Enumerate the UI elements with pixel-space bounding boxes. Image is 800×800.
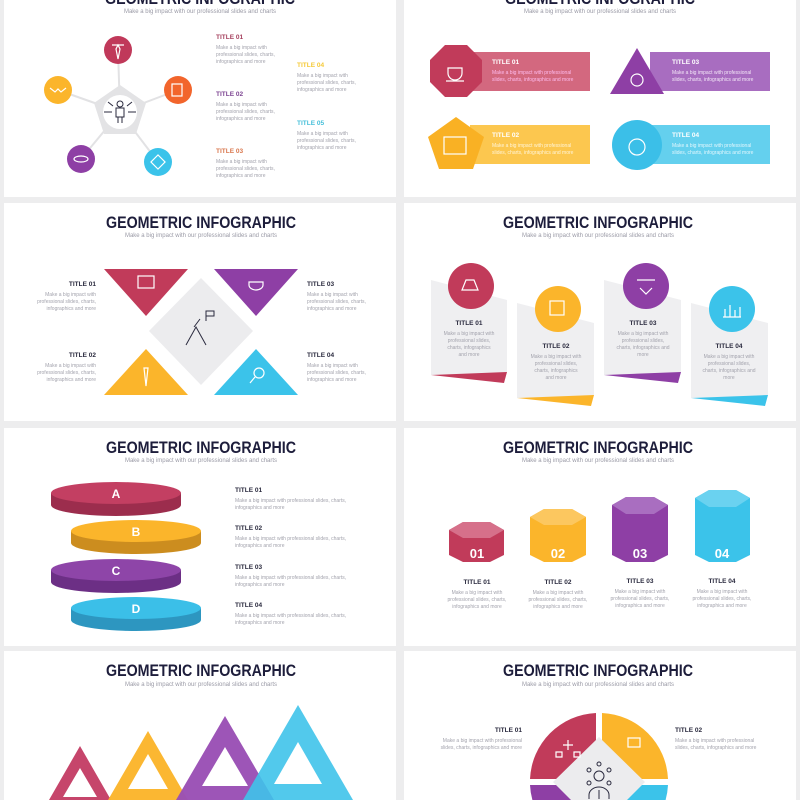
text items: infographics and more bbox=[216, 173, 266, 179]
disc B bbox=[71, 520, 201, 554]
ring segments bbox=[530, 713, 668, 800]
panel: slide 7 triangles bbox=[4, 651, 396, 800]
banner 01 bbox=[430, 45, 590, 97]
disc texts: TITLE 03 bbox=[235, 564, 262, 571]
disc texts: infographics and more bbox=[235, 620, 285, 626]
side texts: professional slides, charts, bbox=[37, 299, 96, 305]
card 02: professional slides, bbox=[535, 361, 577, 367]
prism texts: infographics and more bbox=[615, 603, 665, 609]
center pentagon with person icon bbox=[94, 85, 146, 134]
disc texts: infographics and more bbox=[235, 582, 285, 588]
prism 01: 01 bbox=[470, 546, 484, 561]
card 04: professional slides, bbox=[708, 361, 750, 367]
slide 3 title: GEOMETRIC INFOGRAPHIC bbox=[106, 213, 296, 232]
slide 8 texts: Make a big impact with professional bbox=[443, 738, 522, 744]
prism texts: TITLE 02 bbox=[544, 579, 572, 586]
disc texts: TITLE 02 bbox=[235, 525, 262, 532]
banner 03: slides, charts, infographics and more bbox=[672, 77, 754, 83]
banner 02: slides, charts, infographics and more bbox=[492, 150, 574, 156]
text items: Make a big impact with bbox=[216, 45, 267, 51]
side texts: TITLE 03 bbox=[307, 281, 334, 288]
text items: Make a big impact with bbox=[297, 131, 348, 137]
connectors bbox=[58, 50, 178, 162]
slide 6 title: GEOMETRIC INFOGRAPHIC bbox=[503, 438, 693, 457]
disc texts: Make a big impact with professional slides, charts, bbox=[235, 613, 346, 619]
disc texts: infographics and more bbox=[235, 543, 285, 549]
slide 8 title: GEOMETRIC INFOGRAPHIC bbox=[503, 661, 693, 680]
disc texts: infographics and more bbox=[235, 505, 285, 511]
prism texts: professional slides, charts, bbox=[693, 596, 751, 602]
slide 2 subtitle: Make a big impact with our professional slides and charts bbox=[524, 9, 676, 15]
prism texts: TITLE 03 bbox=[626, 578, 654, 585]
card 04: charts, infographics and bbox=[702, 368, 756, 374]
prism 01 bbox=[449, 522, 504, 562]
slide 3 subtitle: Make a big impact with our professional slides and charts bbox=[125, 233, 277, 239]
prism texts: professional slides, charts, bbox=[529, 597, 587, 603]
card 03: professional slides, bbox=[622, 338, 664, 344]
disc texts: TITLE 01 bbox=[235, 487, 262, 494]
card 01: charts, infographics bbox=[447, 345, 491, 351]
slide 1 subtitle: Make a big impact with our professional slides and charts bbox=[124, 9, 276, 15]
side texts: TITLE 01 bbox=[69, 281, 96, 288]
card 03: charts, infographics and bbox=[616, 345, 670, 351]
card 02: and more bbox=[545, 375, 567, 381]
slide 7 title: GEOMETRIC INFOGRAPHIC bbox=[106, 661, 296, 680]
banner 03: Make a big impact with professional bbox=[672, 70, 751, 76]
slide 8 texts: slides, charts, infographics and more bbox=[675, 745, 757, 751]
text items: TITLE 05 bbox=[297, 120, 324, 127]
side texts: infographics and more bbox=[47, 306, 96, 312]
side texts: infographics and more bbox=[47, 377, 96, 383]
text items: professional slides, charts, bbox=[216, 166, 275, 172]
side texts: infographics and more bbox=[307, 306, 357, 312]
panel: slide 1 pentagon network bbox=[4, 0, 396, 197]
card 02 bbox=[517, 286, 594, 406]
prism texts: TITLE 04 bbox=[708, 578, 736, 585]
slide 4 subtitle: Make a big impact with our professional slides and charts bbox=[522, 233, 674, 239]
card 04: TITLE 04 bbox=[715, 343, 743, 350]
disc C bbox=[51, 559, 181, 593]
side texts: TITLE 04 bbox=[307, 352, 334, 359]
prism 04: 04 bbox=[715, 546, 730, 561]
prism 03: 03 bbox=[633, 546, 647, 561]
card 04: Make a big impact with bbox=[704, 354, 755, 360]
prism texts: professional slides, charts, bbox=[611, 596, 669, 602]
slide 8 texts: TITLE 01 bbox=[495, 727, 522, 734]
disc A: A bbox=[112, 487, 121, 501]
text items: TITLE 01 bbox=[216, 34, 243, 41]
card 03: more bbox=[637, 352, 649, 358]
text items: professional slides, charts, bbox=[297, 138, 356, 144]
text items bbox=[216, 34, 356, 179]
side texts: infographics and more bbox=[307, 377, 357, 383]
text items: infographics and more bbox=[216, 59, 266, 65]
prism texts: infographics and more bbox=[697, 603, 747, 609]
side texts: Make a big impact with bbox=[45, 363, 96, 369]
disc texts: Make a big impact with professional slides, charts, bbox=[235, 498, 346, 504]
center diamond bbox=[149, 278, 253, 385]
card 03: TITLE 03 bbox=[629, 320, 657, 327]
text items: Make a big impact with bbox=[216, 159, 267, 165]
prism texts: infographics and more bbox=[533, 604, 583, 610]
prism 02: 02 bbox=[551, 546, 565, 561]
side texts: professional slides, charts, bbox=[37, 370, 96, 376]
prism 03 bbox=[612, 497, 668, 562]
text items: infographics and more bbox=[297, 87, 347, 93]
disc texts bbox=[235, 487, 346, 626]
card 01: TITLE 01 bbox=[455, 320, 483, 327]
side texts: professional slides, charts, bbox=[307, 299, 366, 305]
text items: infographics and more bbox=[216, 116, 266, 122]
card 03 bbox=[604, 263, 681, 383]
side texts: Make a big impact with bbox=[45, 292, 96, 298]
banner 03 bbox=[610, 48, 770, 94]
disc B: B bbox=[132, 525, 141, 539]
panel: slide 2 shapes with banners bbox=[404, 0, 796, 197]
disc D: D bbox=[132, 602, 141, 616]
icon circles bbox=[44, 36, 192, 176]
panel: slide 6 hexagonal prisms bbox=[404, 428, 796, 646]
side texts: Make a big impact with bbox=[307, 363, 358, 369]
text items: infographics and more bbox=[297, 145, 347, 151]
card 03: Make a big impact with bbox=[618, 331, 669, 337]
side texts: professional slides, charts, bbox=[307, 370, 366, 376]
text items: professional slides, charts, bbox=[216, 52, 275, 58]
banner 01: TITLE 01 bbox=[492, 59, 519, 66]
triangle rings bbox=[49, 705, 353, 800]
slide 4 title: GEOMETRIC INFOGRAPHIC bbox=[503, 213, 693, 232]
slide 5 subtitle: Make a big impact with our professional slides and charts bbox=[125, 458, 277, 464]
card 02: TITLE 02 bbox=[542, 343, 570, 350]
text items: Make a big impact with bbox=[297, 73, 348, 79]
prism texts: professional slides, charts, bbox=[448, 597, 506, 603]
banner 02: Make a big impact with professional bbox=[492, 143, 571, 149]
card 01: Make a big impact with bbox=[444, 331, 495, 337]
prism texts: Make a big impact with bbox=[452, 590, 503, 596]
slide 5 title: GEOMETRIC INFOGRAPHIC bbox=[106, 438, 296, 457]
text items: professional slides, charts, bbox=[297, 80, 356, 86]
banner 04: slides, charts, infographics and more bbox=[672, 150, 754, 156]
card 02: Make a big impact with bbox=[531, 354, 582, 360]
banner 04 bbox=[612, 120, 770, 170]
banner 01: Make a big impact with professional bbox=[492, 70, 571, 76]
slide 8 texts: slides, charts, infographics and more bbox=[441, 745, 522, 751]
slide 8 subtitle: Make a big impact with our professional slides and charts bbox=[522, 682, 674, 688]
text items: TITLE 03 bbox=[216, 148, 243, 155]
disc texts: Make a big impact with professional slides, charts, bbox=[235, 575, 346, 581]
panel: slide 5 stacked discs bbox=[4, 428, 396, 646]
prism texts: infographics and more bbox=[452, 604, 502, 610]
disc texts: TITLE 04 bbox=[235, 602, 262, 609]
banner 04: TITLE 04 bbox=[672, 132, 699, 139]
card 04 bbox=[691, 286, 768, 406]
banner 02 bbox=[428, 117, 590, 169]
banner 02: TITLE 02 bbox=[492, 132, 519, 139]
banner 01: slides, charts, infographics and more bbox=[492, 77, 574, 83]
card 02: charts, infographics bbox=[534, 368, 578, 374]
panel: slide 3 triangles and diamond bbox=[4, 203, 396, 421]
card 01 bbox=[431, 263, 507, 383]
text items: professional slides, charts, bbox=[216, 109, 275, 115]
card 04: more bbox=[723, 375, 735, 381]
text items: TITLE 04 bbox=[297, 62, 324, 69]
disc C: C bbox=[112, 564, 121, 578]
slide 7 subtitle: Make a big impact with our professional slides and charts bbox=[125, 682, 277, 688]
disc D bbox=[71, 597, 201, 631]
text items: Make a big impact with bbox=[216, 102, 267, 108]
banner 04: Make a big impact with professional bbox=[672, 143, 751, 149]
disc A bbox=[51, 482, 181, 516]
text items: TITLE 02 bbox=[216, 91, 243, 98]
panel: slide 8 ring segments bbox=[404, 651, 796, 800]
banner 03: TITLE 03 bbox=[672, 59, 699, 66]
triangles bbox=[104, 269, 298, 395]
prism 02 bbox=[530, 509, 586, 562]
slide 8 texts: TITLE 02 bbox=[675, 727, 702, 734]
prism texts: Make a big impact with bbox=[697, 589, 748, 595]
slide 8 texts bbox=[441, 727, 757, 751]
side texts: Make a big impact with bbox=[307, 292, 358, 298]
prism texts: Make a big impact with bbox=[533, 590, 584, 596]
slide 8 texts: Make a big impact with professional bbox=[675, 738, 754, 744]
card 01: professional slides, bbox=[448, 338, 490, 344]
prism 04 bbox=[695, 490, 750, 562]
slide 6 subtitle: Make a big impact with our professional slides and charts bbox=[522, 458, 674, 464]
card 01: and more bbox=[458, 352, 480, 358]
prism texts: TITLE 01 bbox=[463, 579, 491, 586]
prism texts bbox=[448, 578, 751, 610]
side texts bbox=[37, 281, 366, 383]
panel: slide 4 cards bbox=[404, 203, 796, 421]
disc texts: Make a big impact with professional slides, charts, bbox=[235, 536, 346, 542]
prism texts: Make a big impact with bbox=[615, 589, 666, 595]
side texts: TITLE 02 bbox=[69, 352, 96, 359]
